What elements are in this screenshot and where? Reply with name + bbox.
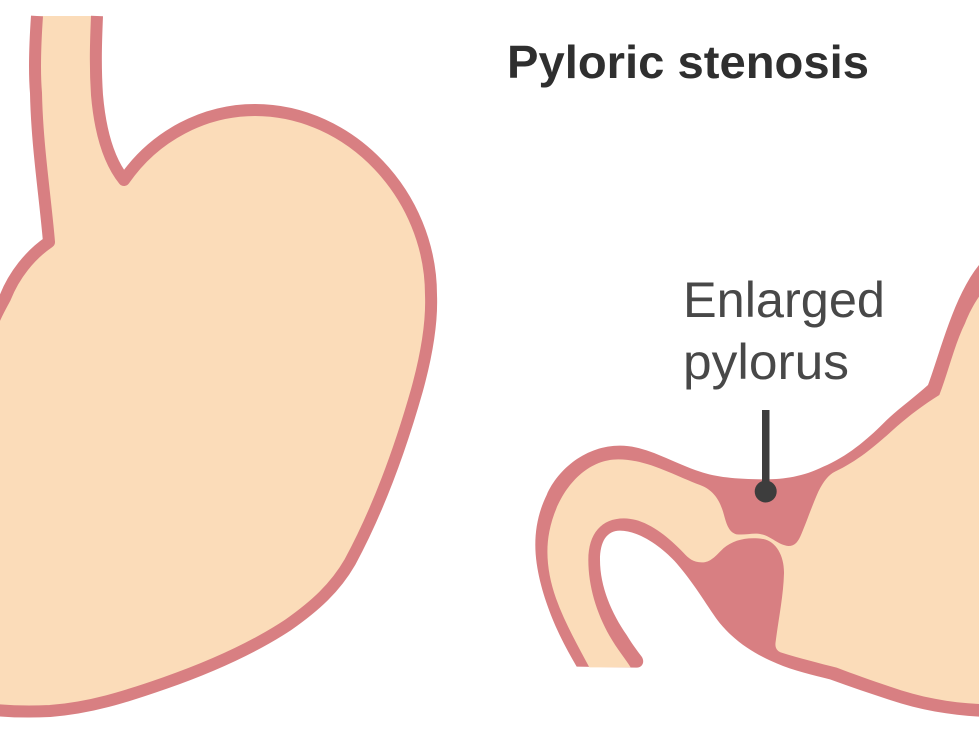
pointer line with dot [755, 410, 777, 502]
stomach lumen [547, 297, 979, 704]
pyloric stenosis stomach [535, 265, 979, 717]
label: enlarged pylorus: Enlarged [683, 272, 885, 328]
label: enlarged pylorus: pylorus [683, 334, 849, 390]
stomach wall [535, 265, 979, 717]
title: Pyloric stenosis [507, 36, 869, 88]
normal stomach [0, 16, 431, 712]
label: enlarged pylorus [683, 272, 885, 390]
